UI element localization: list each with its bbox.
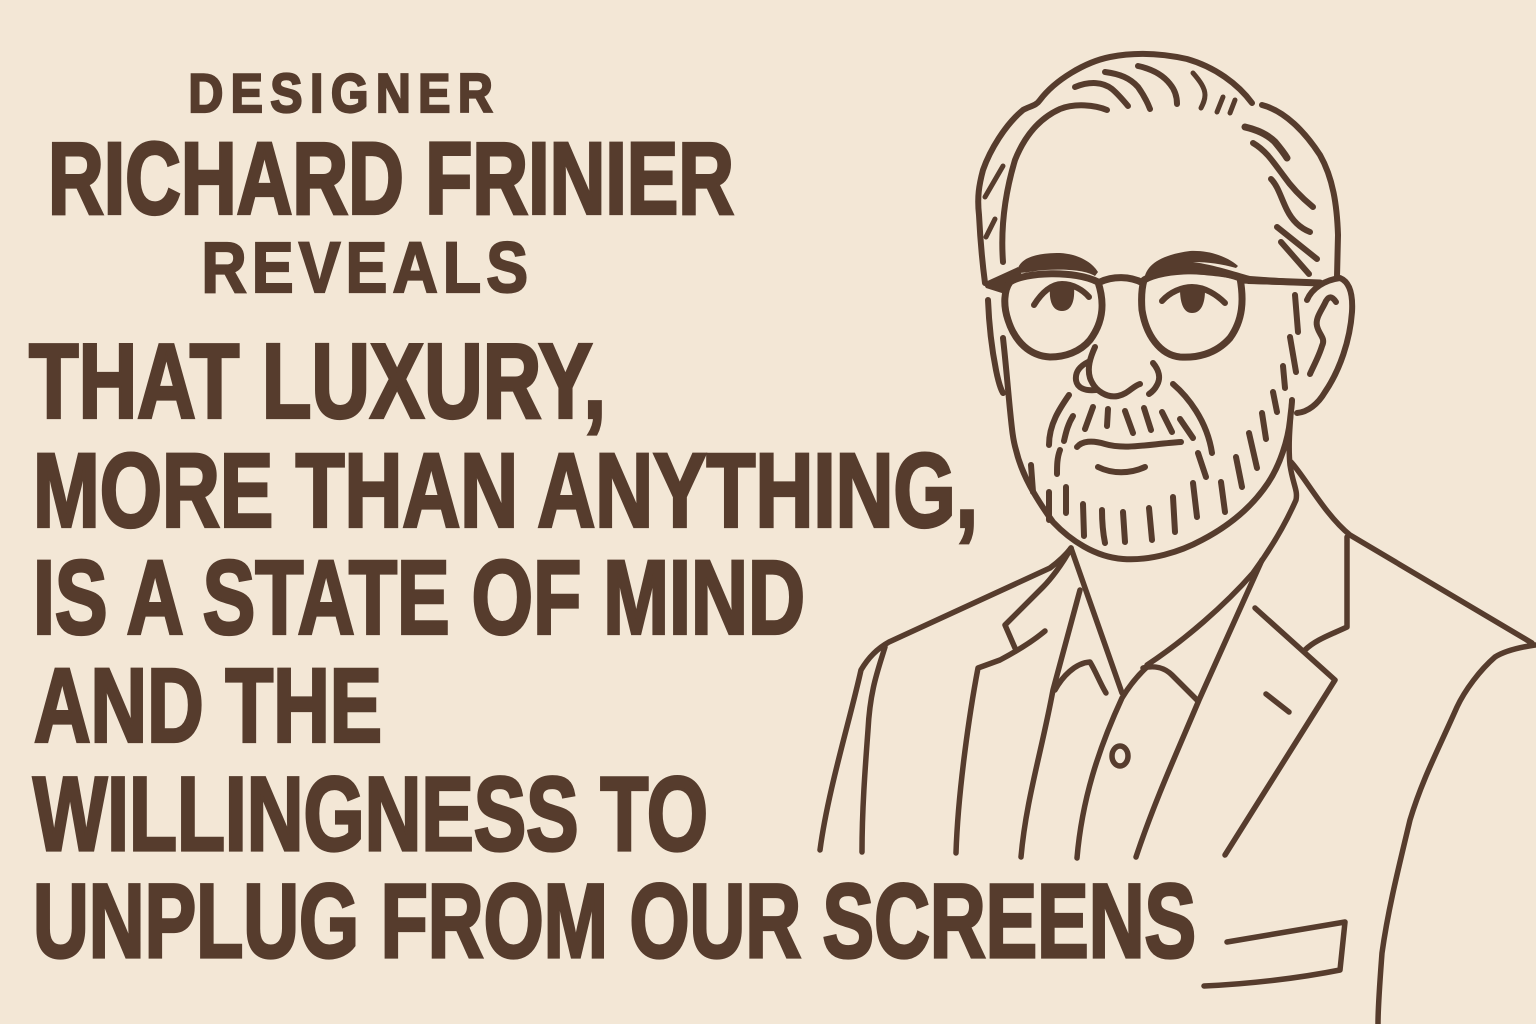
ear	[1297, 278, 1352, 413]
pocket	[1204, 922, 1345, 986]
nose	[1076, 347, 1159, 396]
beard stubble	[1031, 295, 1298, 543]
heading: designer: DESIGNER	[188, 62, 493, 124]
quote line 5: WILLINGNESS TO	[33, 756, 708, 873]
quote line 2: MORE THAN ANYTHING,	[33, 432, 978, 550]
left lapel	[1005, 548, 1071, 648]
heading block	[48, 62, 734, 308]
right lapel lines	[1147, 400, 1296, 665]
quote line 3: IS A STATE OF MIND	[33, 540, 805, 656]
face outline	[988, 300, 1292, 559]
collar and shirt	[1071, 548, 1122, 693]
quote line 1: THAT LUXURY,	[29, 322, 606, 440]
portrait illustration	[820, 54, 1535, 1024]
eyes	[1034, 284, 1225, 313]
button	[1112, 746, 1128, 766]
quote line 4: AND THE	[34, 648, 382, 764]
right sleeve	[1378, 645, 1535, 1024]
heading: richard frinier: RICHARD FRINIER	[48, 122, 734, 236]
left shoulder and sleeve	[820, 548, 1071, 850]
heading: reveals: REVEALS	[202, 228, 528, 308]
mouth	[1077, 442, 1181, 472]
eyebrows	[983, 251, 1320, 294]
quote text	[29, 322, 1196, 980]
glasses	[1005, 271, 1320, 357]
hair outline	[978, 54, 1338, 283]
jacket and shirt	[820, 400, 1535, 1024]
